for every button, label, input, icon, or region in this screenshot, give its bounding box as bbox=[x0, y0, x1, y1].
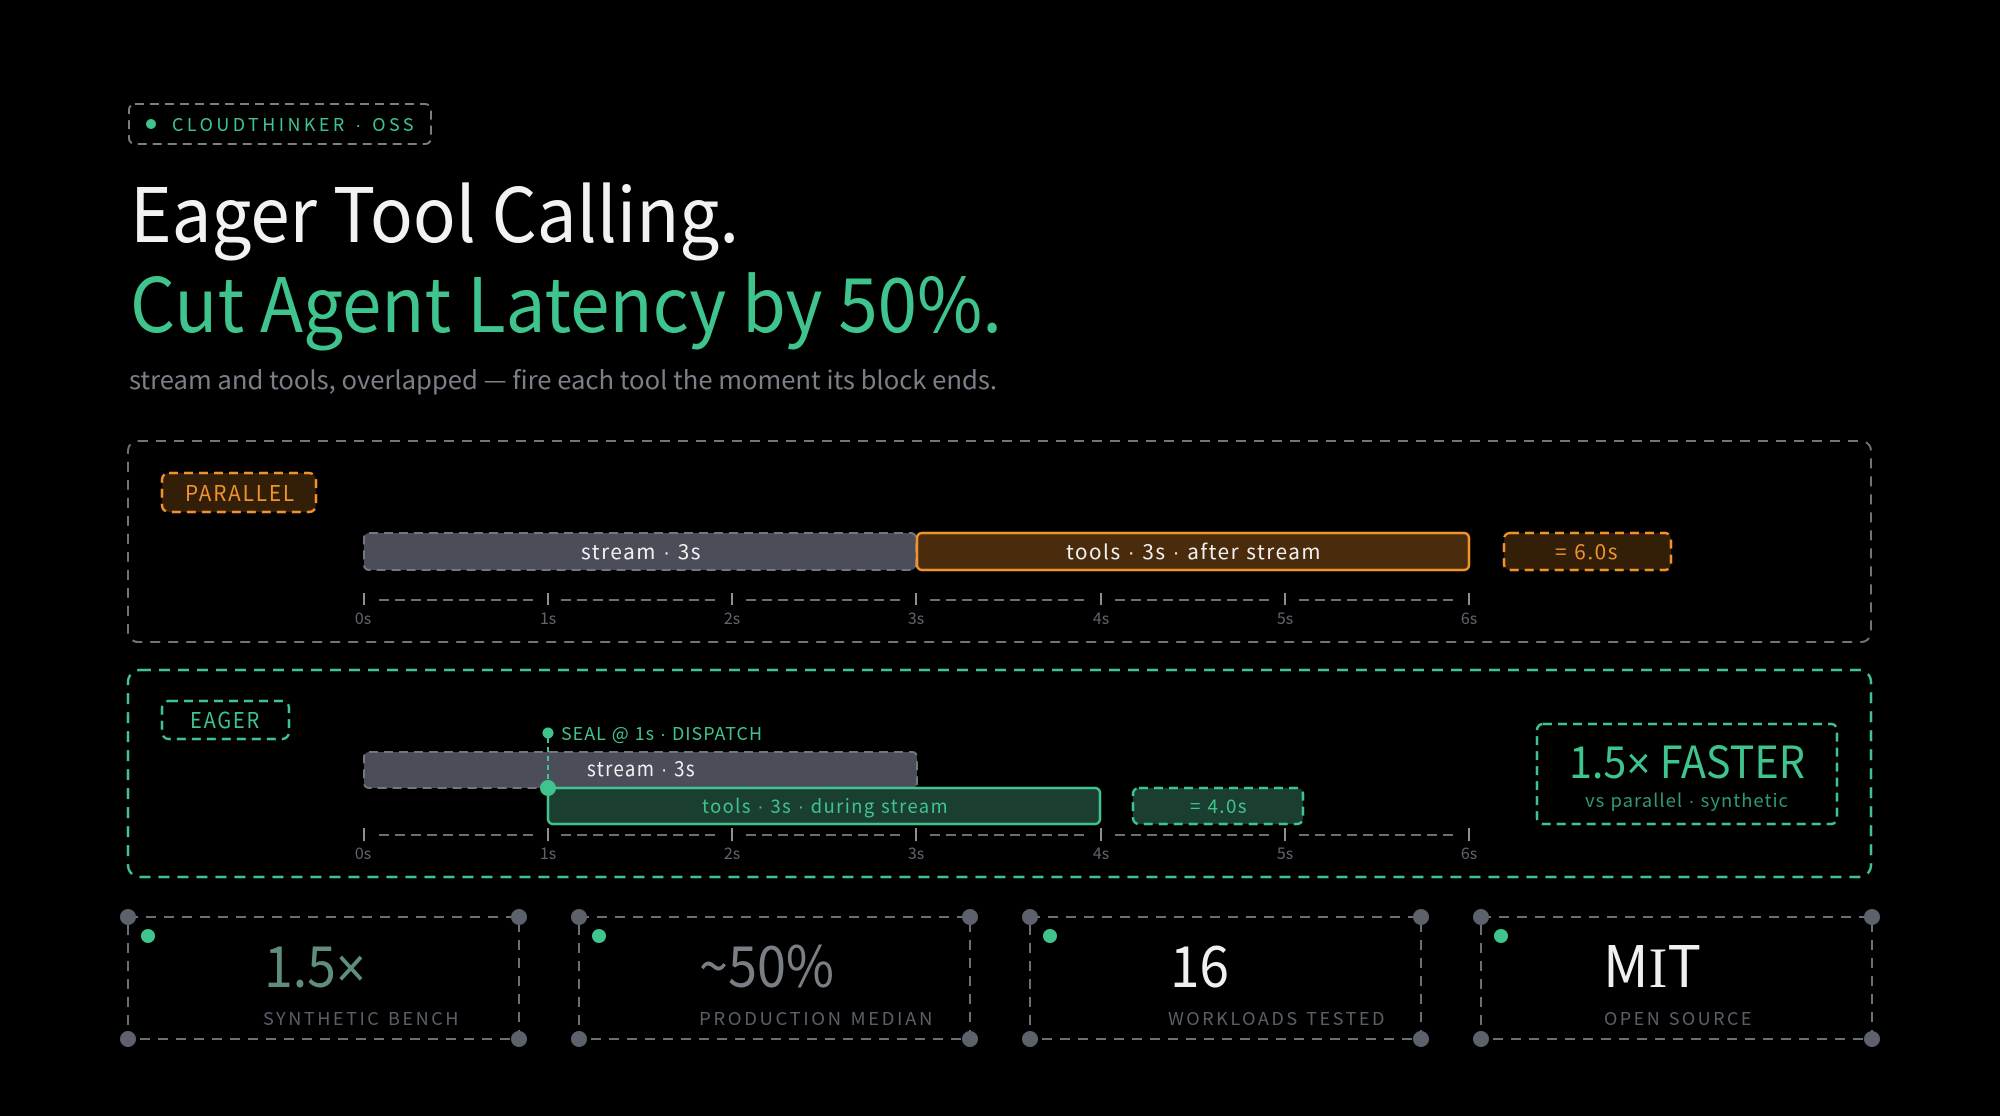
stat card: workloads tested bbox=[1022, 909, 1429, 1047]
stat card: open source: OPEN SOURCE bbox=[1604, 1005, 1754, 1031]
tag: parallel: PARALLEL bbox=[185, 476, 296, 508]
axis: eager: 2s bbox=[724, 840, 740, 864]
axis: eager: 5s bbox=[1277, 840, 1293, 864]
bar: tools during stream bbox=[548, 788, 1100, 824]
stat card: workloads tested: WORKLOADS TESTED bbox=[1168, 1005, 1387, 1031]
stat card: production median: PRODUCTION MEDIAN bbox=[699, 1005, 935, 1031]
axis: eager: 6s bbox=[1461, 840, 1477, 864]
axis: eager: 4s bbox=[1093, 840, 1109, 864]
callout: 1.5x faster: vs parallel · synthetic bbox=[1585, 787, 1789, 813]
title bbox=[130, 155, 1002, 354]
tag: eager bbox=[162, 701, 289, 739]
total: 6.0s bbox=[1504, 533, 1671, 570]
axis: parallel bbox=[355, 593, 1477, 629]
stat card: open source: MIT bbox=[1603, 922, 1701, 1004]
axis: parallel: 5s bbox=[1277, 605, 1293, 629]
stat card: workloads tested: 16 bbox=[1170, 922, 1229, 1004]
total: 4.0s: = 4.0s bbox=[1190, 792, 1248, 819]
bar: stream 3s: stream · 3s bbox=[581, 536, 702, 565]
axis: eager: 1s bbox=[540, 840, 556, 864]
axis: eager bbox=[355, 828, 1477, 864]
bar: tools after stream bbox=[917, 533, 1469, 570]
title: Cut Agent Latency by 50%. bbox=[130, 245, 1002, 354]
marker: seal at 1s dispatch bbox=[540, 720, 763, 796]
bar: tools after stream: tools · 3s · after stream bbox=[1066, 536, 1322, 565]
axis: eager: 3s bbox=[908, 840, 924, 864]
panel: parallel timeline bbox=[128, 441, 1871, 642]
axis: parallel: 6s bbox=[1461, 605, 1477, 629]
bar: stream 3s: stream · 3s bbox=[587, 753, 696, 782]
axis: parallel: 0s bbox=[355, 605, 371, 629]
axis: parallel: 1s bbox=[540, 605, 556, 629]
callout: 1.5x faster: 1.5× FASTER bbox=[1569, 727, 1805, 791]
axis: parallel: 2s bbox=[724, 605, 740, 629]
axis: parallel: 3s bbox=[908, 605, 924, 629]
marker: seal at 1s dispatch: SEAL @ 1s · DISPATCH bbox=[561, 720, 763, 746]
axis: parallel: 4s bbox=[1093, 605, 1109, 629]
bar: stream 3s bbox=[364, 533, 916, 570]
stat card: production median: ~50% bbox=[699, 922, 834, 1004]
tag: parallel bbox=[162, 473, 316, 512]
panel: eager timeline bbox=[128, 670, 1871, 877]
stat card: open source bbox=[1473, 909, 1880, 1047]
title: Eager Tool Calling. bbox=[130, 155, 739, 264]
bar: stream 3s bbox=[364, 752, 917, 788]
tag: eager: EAGER bbox=[190, 703, 261, 735]
stat card: synthetic bench: 1.5× bbox=[264, 922, 366, 1004]
total: 6.0s: = 6.0s bbox=[1555, 536, 1619, 565]
callout: 1.5x faster bbox=[1537, 724, 1837, 824]
badge: CloudThinker OSS bbox=[129, 104, 431, 144]
subtitle: stream and tools, overlapped — fire each tool the moment its block ends. bbox=[129, 361, 997, 397]
stat card: synthetic bench bbox=[120, 909, 527, 1047]
stat card: production median bbox=[571, 909, 978, 1047]
total: 4.0s bbox=[1133, 788, 1303, 824]
badge: CloudThinker OSS: CLOUDTHINKER · OSS bbox=[172, 111, 417, 137]
axis: eager: 0s bbox=[355, 840, 371, 864]
bar: tools during stream: tools · 3s · during stream bbox=[702, 792, 949, 819]
stat card: synthetic bench: SYNTHETIC BENCH bbox=[263, 1005, 461, 1031]
